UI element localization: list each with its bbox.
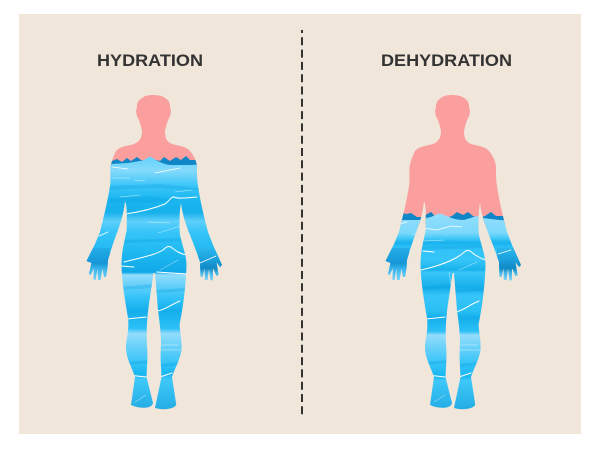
hands <box>386 248 521 280</box>
dry upper body <box>400 95 506 225</box>
water fill <box>86 156 222 410</box>
water fill <box>386 214 521 410</box>
white wave crests <box>399 222 511 402</box>
white wave crests <box>99 167 216 402</box>
heading: hydration: HYDRATION <box>97 52 203 70</box>
dashed divider <box>301 30 303 417</box>
dark wave peaks <box>105 156 200 170</box>
heading: dehydration: DEHYDRATION <box>381 52 512 70</box>
water texture bands <box>422 245 484 367</box>
water texture bands <box>105 184 200 367</box>
dry upper body <box>110 95 197 170</box>
figure: dehydrated body <box>386 95 521 410</box>
dark wave peaks <box>401 212 505 224</box>
figure: hydrated body <box>86 95 222 410</box>
hands <box>86 248 222 280</box>
